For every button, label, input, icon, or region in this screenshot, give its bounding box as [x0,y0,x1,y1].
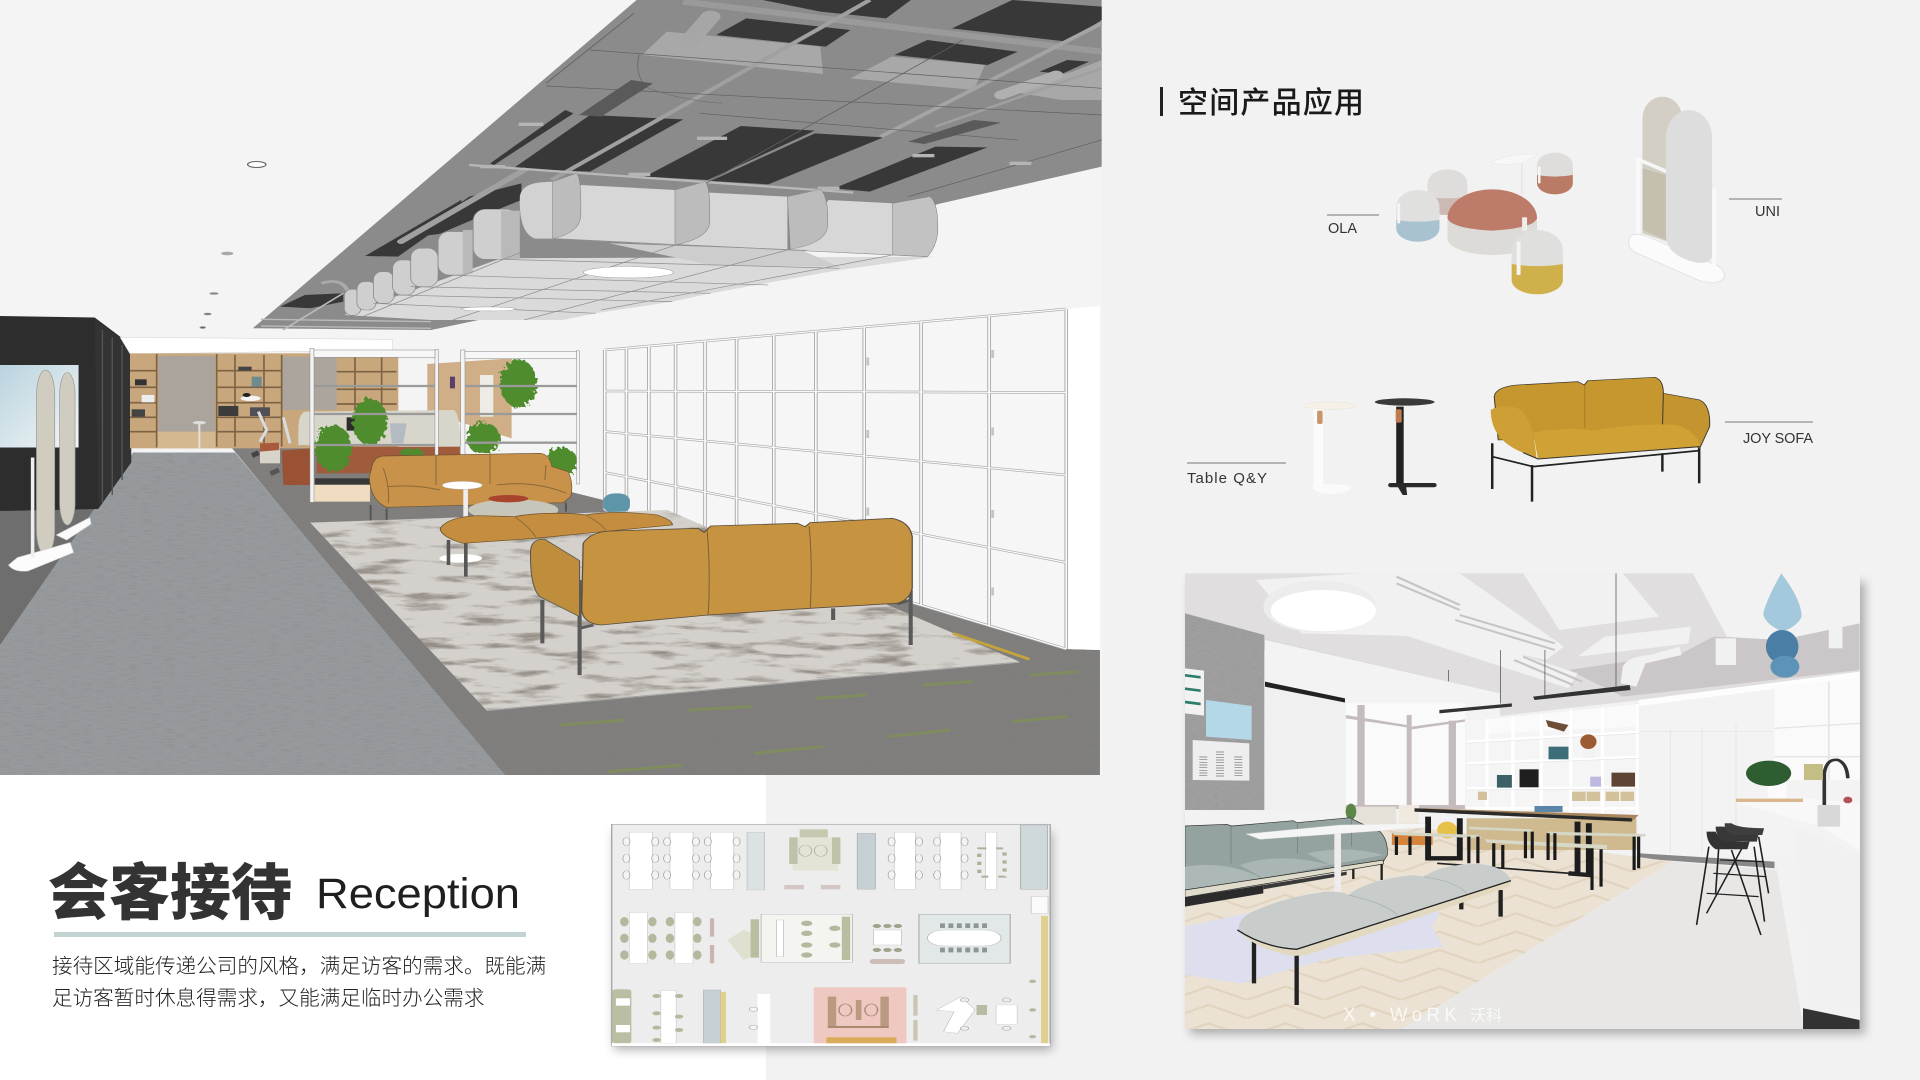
highlighted reception zone [814,987,906,1046]
kitchen, stools and pendants [1697,573,1860,1029]
blue stool [603,493,630,513]
label: JOY SOFA [1725,422,1813,447]
floor plan shadow [614,832,1052,1050]
panel: rendered lounge photo [1185,573,1860,1029]
watermark: X • WoRK [1343,1005,1457,1026]
description text: 足访客暂时休息得需求，又能满足临时办公需求 [52,987,484,1010]
pendant lights [1763,573,1802,678]
lower baffle layer [344,257,936,320]
title: 会客接待 Reception: Reception [316,870,520,918]
soffit band [120,337,393,354]
floor: grey aisle [0,452,505,775]
ceiling downlights [200,162,266,328]
product: JOY sofa [1491,377,1710,502]
floor: right carpet [231,448,1100,775]
shelving and cabinets [1439,672,1860,868]
kitchen island [1736,760,1860,1029]
plant beside sofa [1346,804,1356,820]
front sofa [531,518,912,675]
locker wall [605,306,1100,650]
high white table [1246,823,1425,892]
label: Table Q&Y [1187,463,1286,487]
rug and front sofa set [310,510,1078,772]
ceiling services and baffles [253,0,1102,330]
title: 会客接待 Reception: 会客接待 [48,843,292,932]
description text [52,955,546,1010]
foreground bench [1237,864,1511,1005]
back zone: wood shelves, workstations, racks, far sofa [120,337,630,532]
carpet accents [560,672,1078,772]
front baffle panels [554,185,675,245]
label: JOY SOFA: JOY SOFA [1743,431,1813,447]
floor: left carpet [0,452,140,650]
panel: main reception 3D view [0,0,1102,775]
row 3 workstations [612,989,770,1043]
title: 会客接待 Reception [48,843,520,932]
description text: 接待区域能传递公司的风格，满足访客的需求。既能满 [52,955,546,978]
round ceiling lamp [1264,590,1376,632]
UNI screens in scene [8,370,91,571]
photo shadow [1190,582,1865,1034]
title underline [54,932,526,937]
black meeting room [0,316,131,511]
label: OLA [1327,215,1379,237]
baskets, table and benches [1356,805,1645,890]
terrazzo floor [1401,862,1804,1029]
rug [310,510,1030,711]
wood shelving wall [130,353,398,448]
panel: floor plan [612,824,1050,1046]
herringbone floor [1185,823,1673,1029]
row 2 workstations and rooms [620,913,1048,1043]
far sofa [369,453,572,520]
grey sofa [1185,818,1387,907]
label: UNI [1729,199,1782,220]
cork board [427,358,512,438]
bar stools [1697,823,1769,935]
plants [315,359,578,476]
white disc base [439,554,482,563]
label: UNI: UNI [1755,204,1780,220]
ottoman bench [440,512,672,577]
sofa, rug, table and bench [1185,804,1511,1005]
label: OLA: OLA [1328,221,1357,237]
wall, windows, felt panel and posters [1185,581,1500,810]
workstation partitions [251,410,461,485]
workstations row 1 [623,825,1048,913]
section heading: 空间产品应用: 空间产品应用 [1178,87,1364,120]
metal racks [310,348,579,502]
white lower-left band [0,775,766,1080]
walls, floors, room and lockers [0,162,1100,775]
product: white and black side tables [1303,398,1437,495]
ceiling ducts [1185,573,1860,720]
watermark: 沃科 [1470,1007,1502,1025]
meeting lounge [784,829,840,889]
product group: OLA stools [1396,153,1573,294]
label: Table Q&Y: Table Q&Y [1187,470,1267,487]
pouf, tray and side table [442,481,558,521]
rug [1185,912,1443,983]
angled workstations [913,995,1017,1041]
product: UNI screen [1629,97,1725,282]
